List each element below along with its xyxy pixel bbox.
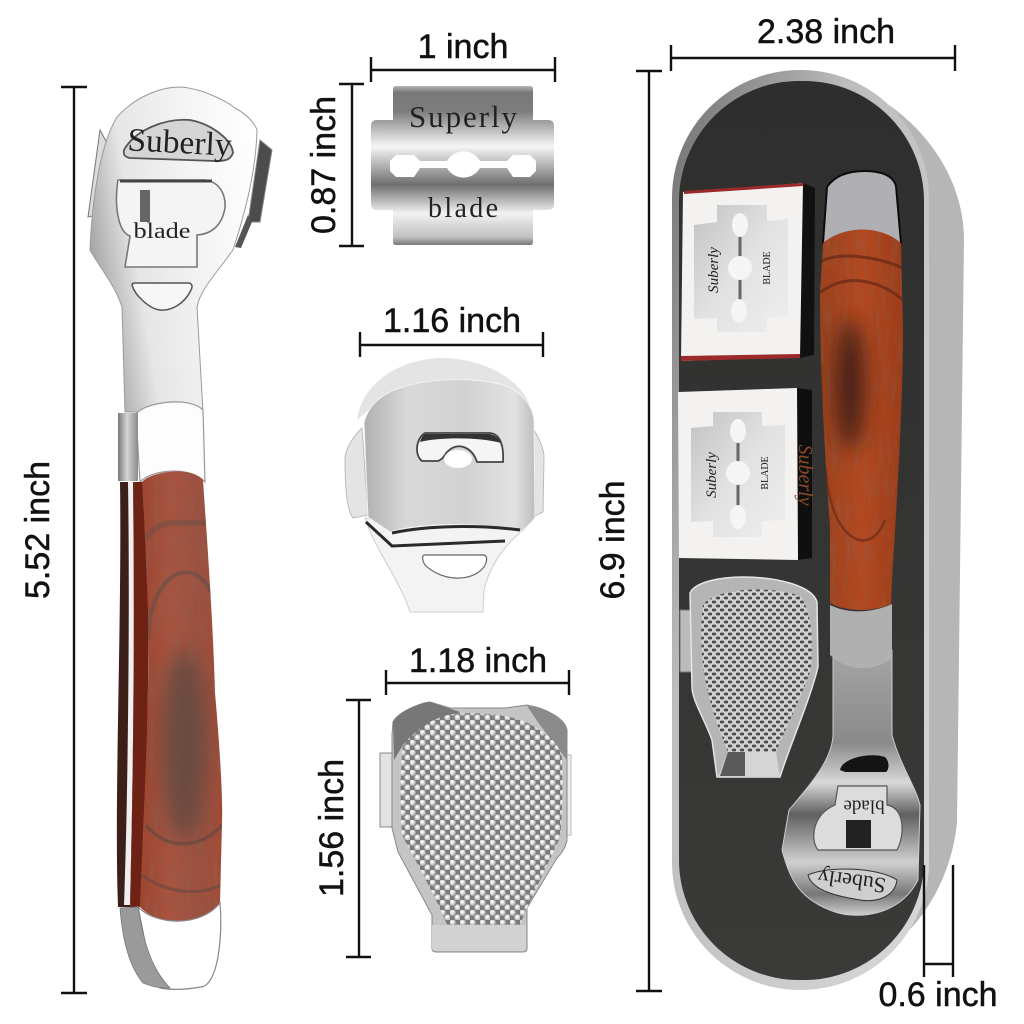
right tab <box>534 430 544 516</box>
small blade card: BLADE <box>762 251 773 285</box>
tool neck <box>782 650 920 915</box>
dimension: tin height 6.9 inch: 6.9 inch <box>594 480 632 600</box>
neck hole <box>423 555 487 578</box>
small blade card: Suberly <box>706 247 722 293</box>
metal collar <box>136 402 205 482</box>
diagonal edge shadow <box>235 215 252 248</box>
dimension: grater height 1.56 inch <box>313 700 371 957</box>
dimension: tool height 5.52 inch: 5.52 inch <box>19 461 57 599</box>
wood handle <box>140 471 222 920</box>
dimension: blade width 1 inch: 1 inch <box>418 28 508 66</box>
blade box 2: Suberly <box>794 444 816 506</box>
dimension: tin width 2.38 inch: 2.38 inch <box>757 13 895 51</box>
left tab <box>345 428 368 518</box>
dimension: blade height 0.87 inch: 0.87 inch <box>305 96 343 234</box>
dimension: tin depth 0.6 inch <box>878 865 998 1014</box>
small blade card: BLADE <box>760 456 771 490</box>
slot window <box>417 433 503 462</box>
tool head plate and neck <box>90 87 257 412</box>
small blade card <box>691 412 785 537</box>
dimension: head width 1.16 inch: 1.16 inch <box>383 302 521 340</box>
tool engraved window: Suberly <box>816 864 887 899</box>
tin grater <box>680 577 818 777</box>
dimension: grater width 1.18 inch: 1.18 inch <box>409 642 547 680</box>
dimension: grater width 1.18 inch <box>386 642 569 695</box>
grater base <box>432 925 526 951</box>
tin body side <box>800 74 964 978</box>
small blade card: Suberly <box>704 452 720 498</box>
tool blade window: blade <box>843 796 885 817</box>
dimension: tin depth 0.6 inch: 0.6 inch <box>878 976 998 1014</box>
grater head <box>380 702 571 952</box>
blade label blade: blade <box>428 193 498 224</box>
foam insert <box>679 81 924 980</box>
tool head back tabs <box>88 130 107 217</box>
lower edge shadow <box>366 522 520 546</box>
blade window: blade <box>134 218 190 243</box>
blade box 2 <box>678 388 816 560</box>
tool top chrome <box>823 171 901 243</box>
neck hole <box>132 283 192 310</box>
tin rim <box>672 70 929 990</box>
shaver tool, full length <box>88 87 272 989</box>
tool neck hole <box>840 755 888 772</box>
dimension: tin height 6.9 inch <box>594 71 662 991</box>
razor blade <box>371 86 554 245</box>
tool collar <box>830 604 892 668</box>
blade window <box>116 180 225 267</box>
tool wood handle <box>820 230 903 610</box>
tin shaver tool <box>782 171 920 915</box>
dimension: tin width 2.38 inch <box>671 13 955 71</box>
blade box 1 <box>681 183 815 361</box>
dimension: blade height 0.87 inch <box>305 84 364 246</box>
tool blade window <box>814 786 902 850</box>
dimension: grater height 1.56 inch: 1.56 inch <box>313 759 351 897</box>
bottom cap <box>138 903 221 989</box>
back crescent <box>357 358 531 420</box>
dimension: blade width 1 inch <box>371 28 555 82</box>
handle spine <box>117 482 134 907</box>
small blade card <box>694 205 788 332</box>
neck below head <box>365 518 523 612</box>
grater tooth field <box>401 713 562 925</box>
engraved Suberly window: Suberly <box>127 122 233 164</box>
metal tin <box>672 70 964 990</box>
blade cover head <box>345 358 544 612</box>
blade label Superly: Superly <box>409 99 518 134</box>
dimension: head width 1.16 inch <box>360 302 543 357</box>
dimension: tool height 5.52 inch <box>19 87 87 993</box>
cover plate <box>364 380 535 532</box>
